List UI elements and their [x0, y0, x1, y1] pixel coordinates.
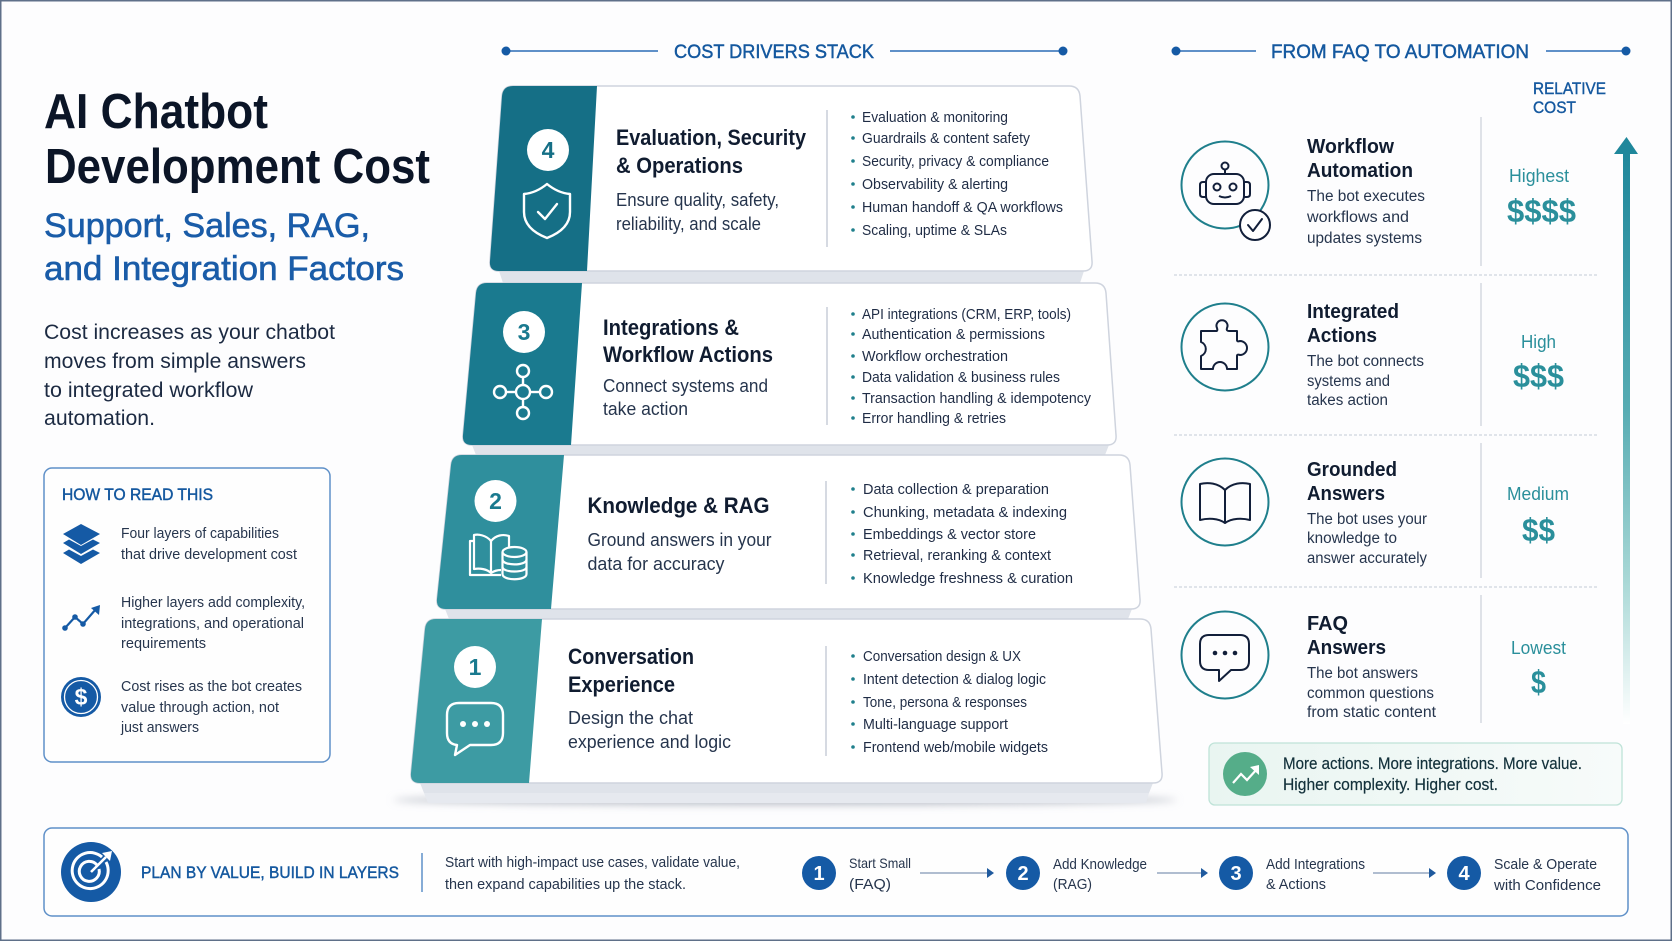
text: higher layers	[121, 594, 305, 652]
cost: lowest: $	[1531, 664, 1546, 700]
layer 4 description: Ensure quality, safety,	[616, 190, 779, 210]
title	[44, 85, 430, 194]
plan text: Start with high-impact use cases, validate value,	[445, 854, 740, 871]
step 3: Add Integrations	[1266, 856, 1365, 873]
layer 3 heading: Integrations &	[603, 315, 739, 340]
step 4: 4	[1458, 863, 1470, 885]
icon: dollar coin	[61, 677, 101, 717]
arrow: step 3 to 4	[1373, 868, 1436, 878]
step 4: with Confidence	[1493, 877, 1601, 894]
layer 4 bullets: Human handoff & QA workflows	[862, 200, 1063, 216]
cost: lowest	[1511, 638, 1566, 700]
intro text: automation.	[44, 406, 155, 430]
icon: rising chart	[62, 605, 100, 631]
cost: high	[1513, 332, 1564, 394]
layer 4 heading: & Operations	[616, 153, 743, 178]
layer 3 description: take action	[603, 399, 688, 419]
layer 4	[490, 86, 1092, 271]
icon: layers	[63, 524, 100, 564]
icon: book and database	[470, 535, 526, 579]
intro text: moves from simple answers	[44, 349, 306, 373]
callout text	[1283, 755, 1582, 794]
icon: speech bubble	[1182, 612, 1268, 698]
layer 1 description: experience and logic	[568, 732, 731, 752]
row: grounded answers	[1182, 443, 1569, 578]
plan text: then expand capabilities up the stack.	[445, 876, 686, 893]
layer 4 bullets: Scaling, uptime & SLAs	[862, 223, 1007, 239]
icon: network	[494, 365, 552, 419]
title: AI Chatbot	[44, 85, 268, 139]
layer 1 heading: Conversation	[568, 644, 694, 669]
row text: knowledge to	[1307, 530, 1397, 547]
layer 3 description	[603, 376, 768, 419]
badge 4: 4	[542, 137, 555, 163]
layer 4 bullets	[851, 110, 1063, 239]
row text: Actions	[1307, 324, 1377, 347]
heading: cost drivers stack: COST DRIVERS STACK	[674, 42, 874, 63]
layer 4 description: reliability, and scale	[616, 214, 761, 234]
row text: systems and	[1307, 373, 1390, 390]
layer 1 description: Design the chat	[568, 708, 693, 728]
arrow: step 1 to 2	[920, 868, 994, 878]
row text: workflows and	[1306, 209, 1409, 226]
row text: updates systems	[1307, 230, 1422, 247]
step 4: Scale & Operate	[1494, 856, 1597, 873]
cost: medium: Medium	[1507, 484, 1569, 504]
step 1	[802, 855, 911, 893]
layer 4 heading	[616, 125, 807, 178]
icon: puzzle piece	[1182, 304, 1268, 390]
layer 3 heading	[603, 315, 773, 367]
row text: Integrated	[1307, 300, 1399, 323]
subtitle: and Integration Factors	[44, 250, 404, 288]
row text: Answers	[1307, 636, 1386, 659]
layer 4 bullets: Security, privacy & compliance	[862, 154, 1049, 170]
step 2: Add Knowledge	[1053, 856, 1147, 873]
cost: highest: Highest	[1509, 166, 1569, 186]
step 1: Start Small	[849, 855, 911, 871]
text: higher layers: Higher layers add complexity,	[121, 594, 305, 611]
badge 2: 2	[489, 488, 502, 514]
layer 1 bullets	[851, 649, 1048, 756]
row text: Automation	[1307, 159, 1413, 182]
panel: cost drivers stack	[393, 86, 1177, 805]
row text	[1307, 458, 1427, 567]
step 2: (RAG)	[1053, 876, 1092, 893]
row text: The bot connects	[1307, 353, 1424, 370]
text: four layers	[121, 525, 298, 563]
badge 3: 3	[518, 319, 530, 345]
text: four layers: that drive development cost	[121, 546, 298, 563]
cost: medium: $$	[1522, 512, 1555, 548]
intro text: Cost increases as your chatbot	[44, 320, 335, 344]
layer 3 bullets: Authentication & permissions	[862, 327, 1045, 343]
step 3	[1219, 856, 1365, 893]
intro text: to integrated workflow	[44, 378, 253, 402]
text: cost rises: value through action, not	[121, 699, 280, 716]
badge 1: 1	[469, 654, 482, 680]
layer 2 bullets	[851, 482, 1073, 587]
title block	[44, 85, 430, 430]
step 2	[1006, 856, 1147, 893]
layer 3	[463, 283, 1116, 445]
callout text: Higher complexity. Higher cost.	[1283, 776, 1498, 794]
intro text	[44, 320, 335, 430]
layer 4 description	[616, 190, 779, 234]
layer 1 bullets: Tone, persona & responses	[863, 695, 1027, 711]
relative cost label: COST	[1533, 98, 1576, 117]
layer 3 description: Connect systems and	[603, 376, 768, 396]
row text: common questions	[1307, 685, 1434, 702]
cost: lowest: Lowest	[1511, 638, 1566, 658]
text: cost rises: just answers	[120, 719, 199, 736]
row text: The bot executes	[1307, 188, 1425, 205]
layer 4 bullets: Evaluation & monitoring	[862, 110, 1008, 126]
row text	[1307, 612, 1437, 721]
icon: open book	[1182, 458, 1268, 546]
layer 3 bullets: Workflow orchestration	[862, 349, 1008, 365]
layer 2 bullets: Retrieval, reranking & context	[863, 548, 1051, 564]
icon: chat bubble	[447, 703, 503, 755]
icon: dollar coin: $	[75, 684, 88, 710]
arrow: rising relative cost	[1614, 137, 1638, 724]
step 3: 3	[1230, 863, 1242, 885]
icon: target	[61, 842, 121, 902]
row text: answer accurately	[1307, 550, 1427, 567]
plan text	[445, 854, 740, 893]
relative cost label: RELATIVE	[1533, 79, 1606, 98]
row text: The bot answers	[1307, 665, 1418, 682]
text: higher layers: integrations, and operational	[121, 615, 304, 632]
step 2: 2	[1017, 863, 1029, 885]
row text: FAQ	[1307, 612, 1348, 635]
row text	[1307, 300, 1424, 409]
text: cost rises: Cost rises as the bot creates	[121, 678, 302, 695]
layer 3 bullets: Data validation & business rules	[862, 370, 1060, 386]
row text: Answers	[1307, 482, 1385, 505]
layer 4 bullets: Guardrails & content safety	[862, 131, 1031, 147]
layer 4 heading: Evaluation, Security	[616, 125, 807, 150]
layer 2 description	[588, 530, 772, 574]
layer 3 heading: Workflow Actions	[603, 342, 773, 367]
subtitle	[44, 207, 404, 288]
layer 3 bullets	[851, 307, 1092, 427]
layer 2 heading: Knowledge & RAG	[588, 493, 770, 518]
arrow: step 2 to 3	[1157, 868, 1208, 878]
step 4	[1447, 856, 1601, 894]
base shadow	[393, 795, 1177, 805]
step 3: & Actions	[1266, 876, 1326, 893]
layer 4 bullets: Observability & alerting	[862, 177, 1008, 193]
title: Development Cost	[45, 140, 430, 194]
plan heading: PLAN BY VALUE, BUILD IN LAYERS	[141, 863, 399, 882]
layer 1 heading: Experience	[568, 672, 675, 697]
icon: shield	[524, 184, 570, 238]
panel: plan by value	[44, 828, 1628, 916]
row: workflow automation	[1182, 117, 1576, 266]
layer 2 bullets: Data collection & preparation	[863, 482, 1049, 498]
badge 1	[454, 646, 496, 688]
cost: medium	[1507, 484, 1569, 548]
panel heading: HOW TO READ THIS	[62, 486, 213, 504]
badge 2	[474, 480, 516, 522]
layer 1 description	[568, 708, 731, 752]
row text: takes action	[1307, 392, 1388, 409]
row text: Grounded	[1307, 458, 1397, 481]
layer 3 bullets: Transaction handling & idempotency	[862, 391, 1092, 407]
text: higher layers: requirements	[121, 635, 206, 652]
layer 3 bullets: API integrations (CRM, ERP, tools)	[862, 307, 1071, 323]
badge 3	[503, 311, 545, 353]
layer 2 bullets: Chunking, metadata & indexing	[863, 505, 1067, 521]
row text: from static content	[1307, 704, 1437, 721]
layer 1 bullets: Frontend web/mobile widgets	[863, 740, 1048, 756]
layer 2 description: Ground answers in your	[588, 530, 772, 550]
layer 1 bullets: Intent detection & dialog logic	[863, 672, 1046, 688]
callout text: More actions. More integrations. More value.	[1283, 755, 1582, 773]
layer 1 heading	[568, 644, 694, 697]
row text	[1306, 135, 1425, 247]
heading: cost drivers stack	[502, 42, 1068, 63]
badge 4	[527, 129, 569, 171]
callout: more value higher cost	[1209, 743, 1622, 805]
icon: robot	[1182, 142, 1270, 240]
layer 1	[411, 619, 1162, 783]
text: cost rises	[120, 678, 302, 736]
cost: highest: $$$$	[1507, 193, 1576, 229]
row text: Workflow	[1307, 135, 1394, 158]
layer 2 description: data for accuracy	[588, 554, 724, 574]
layer 1 bullets: Conversation design & UX	[863, 649, 1021, 665]
cost: high: High	[1521, 332, 1556, 352]
relative cost label	[1533, 79, 1606, 117]
row: integrated actions	[1182, 283, 1564, 426]
step 1: (FAQ)	[849, 876, 891, 893]
row text: The bot uses your	[1307, 511, 1427, 528]
heading: from faq to automation: FROM FAQ TO AUTOMATION	[1271, 42, 1529, 63]
layer 2	[437, 455, 1140, 609]
subtitle: Support, Sales, RAG,	[44, 207, 370, 245]
heading: from faq to automation	[1172, 42, 1630, 63]
panel: how to read this	[44, 468, 330, 762]
layer 3 bullets: Error handling & retries	[862, 411, 1006, 427]
step 1: 1	[813, 863, 825, 885]
layer 2 bullets: Knowledge freshness & curation	[863, 571, 1073, 587]
icon: green trend	[1223, 752, 1267, 796]
row: faq answers	[1182, 595, 1566, 723]
layer 1 bullets: Multi-language support	[863, 717, 1008, 733]
layer 2 bullets: Embeddings & vector store	[863, 527, 1036, 543]
cost: high: $$$	[1513, 358, 1564, 394]
cost: highest	[1507, 166, 1576, 229]
text: four layers: Four layers of capabilities	[121, 525, 279, 542]
